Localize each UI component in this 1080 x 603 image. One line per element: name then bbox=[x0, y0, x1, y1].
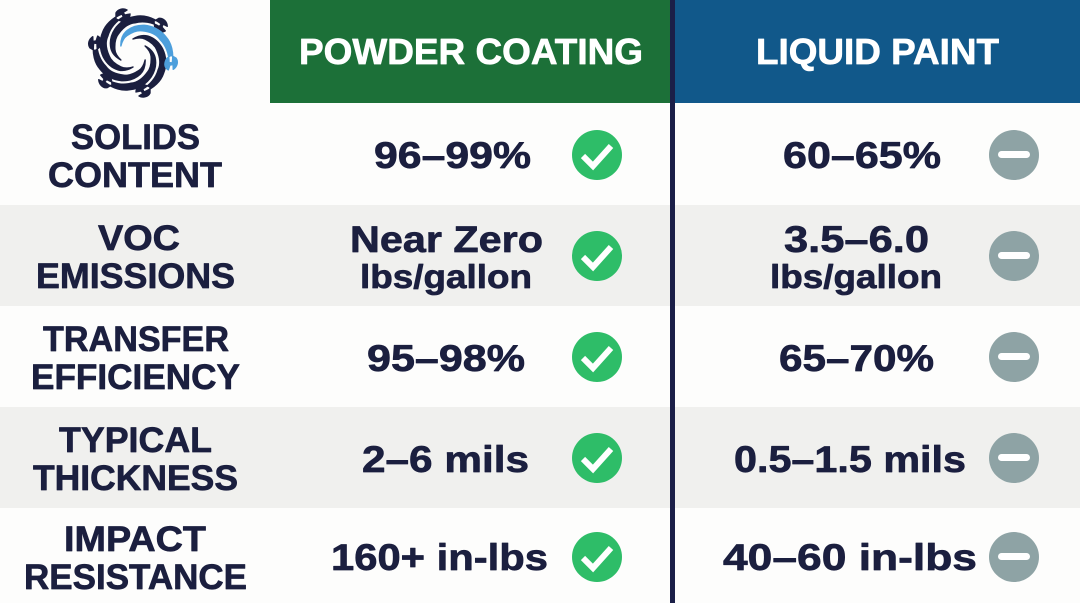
row: transfer efficiency: 65–70% bbox=[779, 338, 934, 379]
row: transfer efficiency bbox=[31, 320, 1039, 397]
header: liquid paint bbox=[675, 0, 1080, 103]
row: solids content: 96–99% bbox=[374, 135, 531, 176]
row: impact resistance: 40–60 in-lbs bbox=[723, 537, 977, 578]
row: solids content bbox=[48, 118, 1039, 195]
row: typical thickness: TYPICAL bbox=[59, 421, 212, 460]
header: powder coating bbox=[270, 0, 670, 103]
logo: swirl of wrenches bbox=[79, 3, 187, 103]
row: VOC emissions: lbs/gallon bbox=[770, 258, 942, 295]
row: VOC emissions: lbs/gallon bbox=[360, 258, 532, 295]
header: liquid paint: LIQUID PAINT bbox=[756, 31, 999, 72]
row: transfer efficiency: 95–98% bbox=[367, 338, 525, 379]
row: typical thickness bbox=[33, 421, 1039, 498]
row: transfer efficiency: TRANSFER bbox=[43, 320, 229, 359]
row: impact resistance: 160+ in-lbs bbox=[331, 537, 548, 578]
row: typical thickness: 0.5–1.5 mils bbox=[734, 439, 966, 480]
row: transfer efficiency: EFFICIENCY bbox=[31, 358, 240, 397]
row: solids content: CONTENT bbox=[48, 156, 222, 195]
row: VOC emissions: VOC bbox=[98, 219, 180, 258]
row: impact resistance: RESISTANCE bbox=[24, 558, 247, 597]
row: impact resistance: IMPACT bbox=[64, 520, 206, 559]
row: typical thickness: 2–6 mils bbox=[362, 439, 529, 480]
column divider bbox=[670, 0, 675, 603]
row: VOC emissions bbox=[36, 219, 1039, 296]
row: impact resistance bbox=[24, 520, 1039, 597]
row: solids content: 60–65% bbox=[783, 135, 941, 176]
row: VOC emissions: EMISSIONS bbox=[36, 257, 235, 296]
row: typical thickness: THICKNESS bbox=[33, 459, 238, 498]
row: VOC emissions: 3.5–6.0 bbox=[784, 219, 929, 260]
header: powder coating: POWDER COATING bbox=[299, 31, 643, 72]
row: solids content: SOLIDS bbox=[71, 118, 200, 157]
row: VOC emissions: Near Zero bbox=[350, 219, 543, 260]
